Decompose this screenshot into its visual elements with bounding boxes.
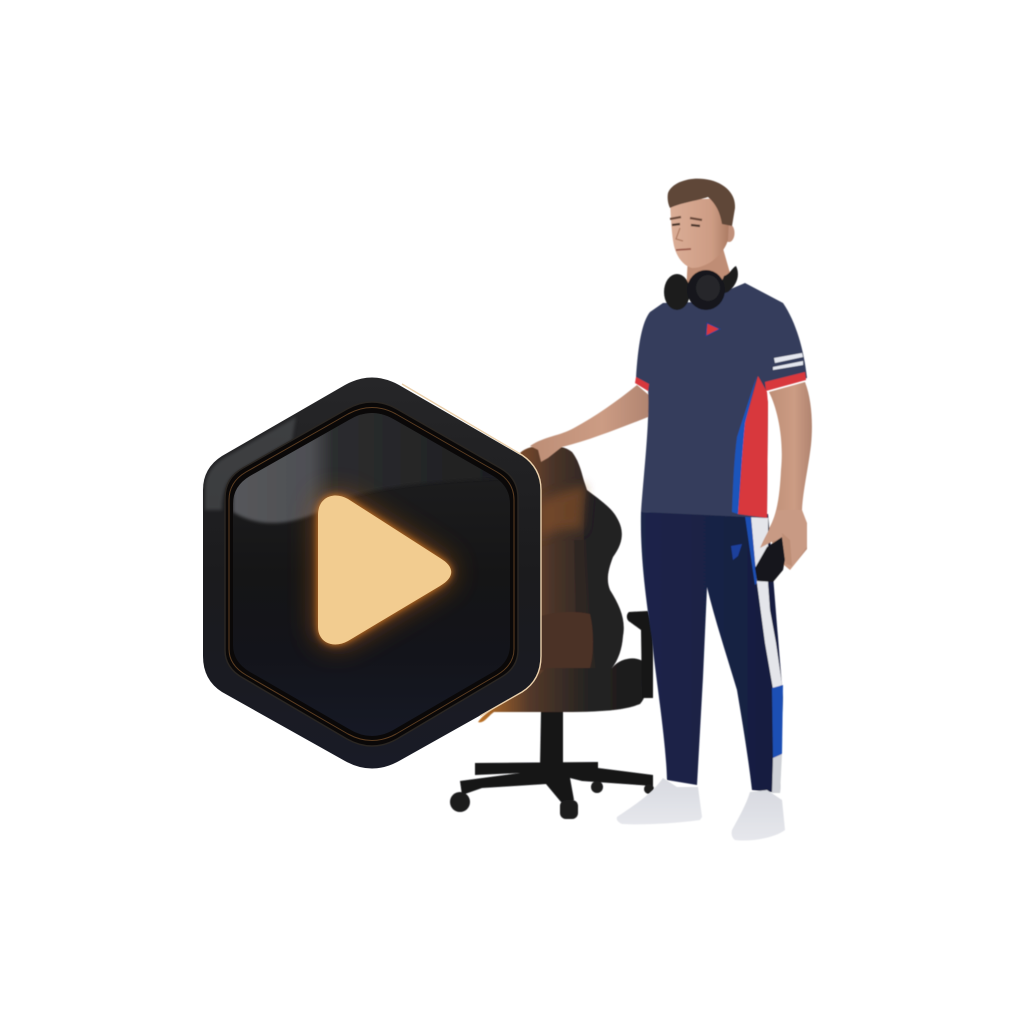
gaming chair xyxy=(450,445,654,819)
sleeve stripes xyxy=(773,353,803,370)
badge outer frame xyxy=(203,378,541,768)
chair lumbar pillow xyxy=(541,612,593,670)
chair shoulder shading xyxy=(540,484,586,538)
game controller xyxy=(755,537,785,582)
shirt red panel xyxy=(738,376,768,518)
chair armrest xyxy=(627,611,653,698)
play badge xyxy=(203,378,541,768)
shirt logo xyxy=(706,323,720,336)
trouser blue side stripe xyxy=(745,516,757,585)
right shoe xyxy=(732,790,785,841)
illustration: play badge, gaming chair and standing gamer xyxy=(202,178,813,840)
chair base xyxy=(460,762,653,802)
face xyxy=(670,198,730,268)
badge rim highlight xyxy=(205,417,296,510)
badge cream edge xyxy=(402,384,541,716)
chair column xyxy=(540,712,563,767)
badge channel xyxy=(225,402,518,746)
facial features xyxy=(670,217,702,220)
legs xyxy=(641,512,783,793)
trouser white stripe xyxy=(751,516,782,689)
left shoe xyxy=(617,778,702,824)
chair wing xyxy=(570,460,624,668)
left arm on chair xyxy=(530,385,650,462)
trouser logo xyxy=(731,544,742,560)
sleeve cuff xyxy=(765,372,806,391)
chair backrest xyxy=(500,445,596,712)
right arm xyxy=(768,382,812,570)
badge gloss xyxy=(233,413,442,524)
neck xyxy=(686,245,732,305)
badge glass face xyxy=(233,413,510,736)
trouser lower grey stripe xyxy=(772,754,782,793)
trouser lower blue stripe xyxy=(772,685,783,758)
shirt blue piping xyxy=(732,375,757,514)
shirt xyxy=(636,283,807,518)
play triangle xyxy=(318,496,451,645)
hair xyxy=(668,179,735,226)
right hand xyxy=(760,510,807,568)
standing gamer xyxy=(530,179,812,841)
headphones xyxy=(664,266,738,310)
play glow xyxy=(318,496,451,645)
chair seat xyxy=(478,658,648,722)
fingers xyxy=(782,533,792,566)
badge amber line xyxy=(229,408,514,740)
ear xyxy=(724,224,734,242)
